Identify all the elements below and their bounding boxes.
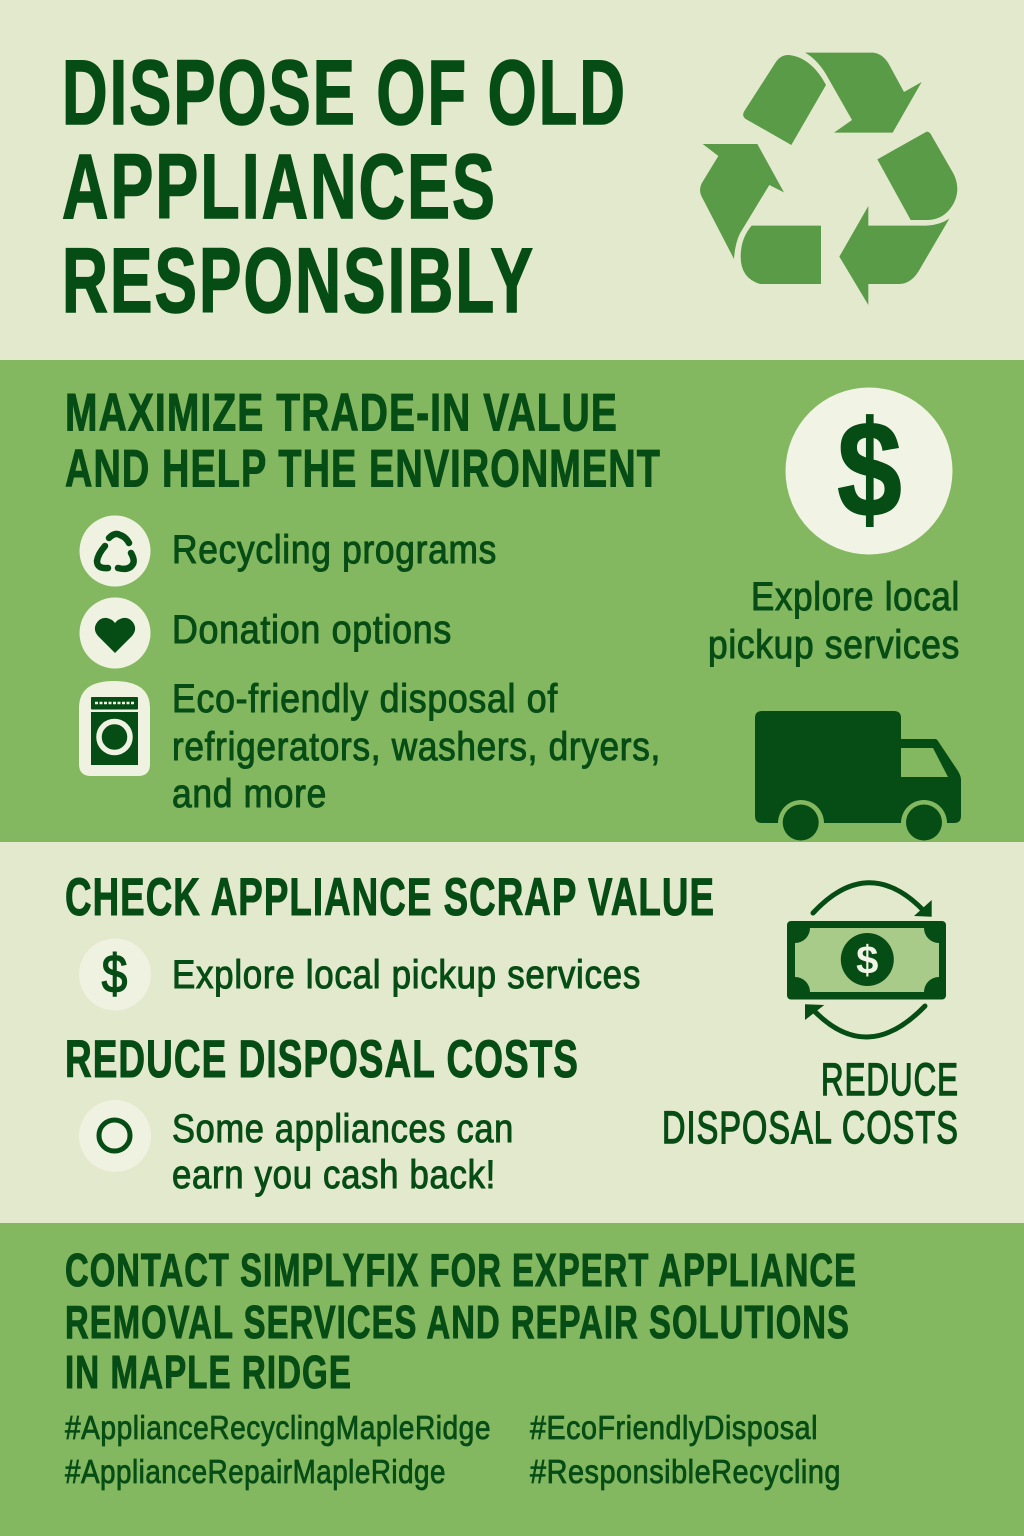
text: eco-friendly disposal: refrigerators, washers, dryers, <box>172 725 661 769</box>
icon: truck <box>755 711 961 840</box>
text: explore local pickup services <box>708 575 960 667</box>
text: reduce disposal costs right: REDUCE <box>821 1054 959 1105</box>
heading: maximize trade-in value <box>65 384 661 498</box>
icon: money with circular arrows <box>787 883 946 1037</box>
hashtags <box>65 1409 841 1490</box>
title: DISPOSE OF OLD <box>62 42 627 144</box>
heading: contact simplyfix: IN MAPLE RIDGE <box>65 1346 352 1398</box>
icon: money with circular arrows: $ <box>856 938 878 982</box>
title: RESPONSIBLY <box>62 230 535 332</box>
panel: title header <box>0 0 1024 360</box>
hashtags: #EcoFriendlyDisposal <box>530 1409 818 1446</box>
icon: dollar circle <box>786 388 952 554</box>
icon: washing machine <box>79 681 150 776</box>
icon: ring <box>79 1100 151 1172</box>
panel: scrap value and disposal costs <box>0 842 1024 1223</box>
icon: recycling symbol <box>700 53 957 305</box>
text: explore local pickup services: Explore local pickup services <box>172 953 641 997</box>
icon: heart <box>80 598 150 668</box>
text: explore local pickup services: Explore local <box>751 575 960 619</box>
title <box>62 42 627 332</box>
hashtags: #ApplianceRepairMapleRidge <box>65 1453 446 1490</box>
text: eco-friendly disposal: Eco-friendly disposal of <box>172 677 558 721</box>
text: explore local pickup services: pickup services <box>708 623 960 667</box>
heading: reduce disposal costs: REDUCE DISPOSAL COSTS <box>65 1030 579 1089</box>
text: donation options: Donation options <box>172 608 452 652</box>
panel: maximize trade-in value <box>0 360 1024 842</box>
text: recycling programs: Recycling programs <box>172 528 497 572</box>
text: cash back: earn you cash back! <box>172 1153 496 1197</box>
heading: check appliance scrap value: CHECK APPLIANCE SCRAP VALUE <box>65 868 715 927</box>
panel: contact footer <box>0 1223 1024 1536</box>
icon: dollar circle: $ <box>837 393 902 545</box>
icon: small dollar: $ <box>102 944 127 1004</box>
title: APPLIANCES <box>62 136 497 238</box>
hashtags: #ResponsibleRecycling <box>530 1453 841 1490</box>
icon: small dollar <box>79 938 151 1010</box>
hashtags: #ApplianceRecyclingMapleRidge <box>65 1409 491 1446</box>
text: eco-friendly disposal: and more <box>172 772 327 816</box>
text: cash back <box>172 1107 514 1197</box>
text: cash back: Some appliances can <box>172 1107 514 1151</box>
text: eco-friendly disposal <box>172 677 661 816</box>
icon: small recycling <box>80 516 150 586</box>
heading: maximize trade-in value: AND HELP THE ENVIRONMENT <box>65 440 661 498</box>
heading: contact simplyfix <box>65 1244 857 1398</box>
text: reduce disposal costs right <box>662 1054 959 1153</box>
heading: maximize trade-in value: MAXIMIZE TRADE-IN VALUE <box>65 384 618 442</box>
